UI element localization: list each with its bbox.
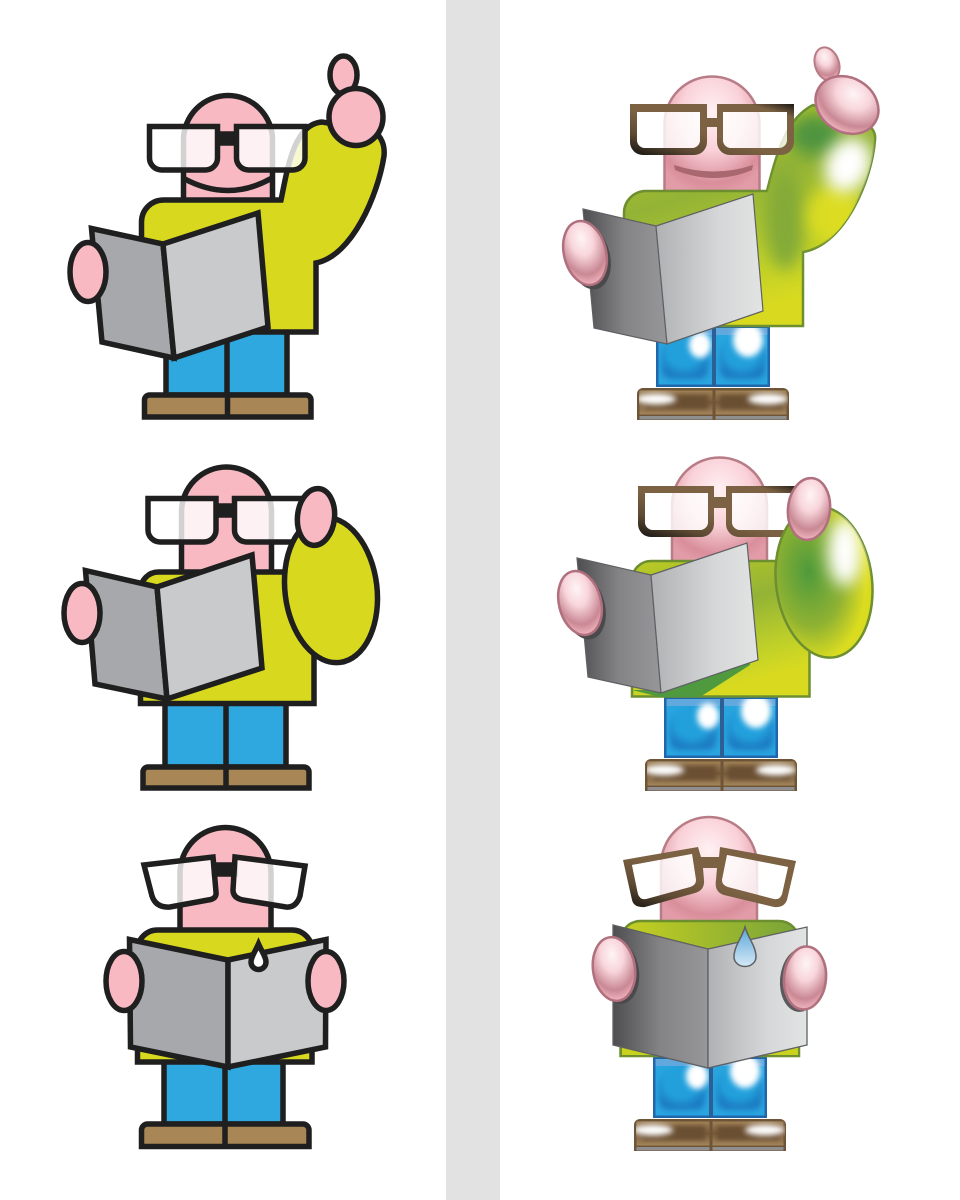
left hand shadow	[593, 937, 643, 1007]
glossy figure: arm raised as oval	[552, 458, 881, 791]
glossy legs and shoes	[644, 694, 797, 791]
thumb	[810, 44, 844, 84]
raised hand	[295, 487, 337, 547]
flat figure: front view with raindrop	[106, 828, 344, 1146]
shoes	[142, 1124, 309, 1146]
hand holding newspaper	[557, 216, 613, 290]
raised arm oval	[774, 508, 874, 659]
legs	[166, 330, 287, 395]
newspaper	[130, 940, 326, 1067]
glasses	[630, 104, 794, 155]
glasses	[148, 498, 304, 542]
glasses	[150, 126, 305, 170]
raindrop	[251, 944, 266, 970]
shoes	[143, 767, 309, 788]
legs	[164, 1060, 283, 1124]
glossy head	[661, 817, 757, 922]
flat figure: arm raised as oval	[64, 467, 386, 788]
glossy legs and shoes	[636, 323, 789, 420]
hand holding newspaper	[70, 242, 106, 302]
newspaper	[613, 925, 807, 1068]
shirt with raised arm	[142, 122, 384, 332]
head	[182, 467, 272, 574]
shirt	[140, 572, 314, 704]
hand holding newspaper	[64, 584, 100, 642]
glossy figure: arm raised with thumb up	[557, 44, 889, 420]
shoes	[144, 395, 311, 417]
glossy shirt with raised arm	[624, 105, 880, 326]
hand shadow	[556, 570, 612, 644]
head	[180, 828, 271, 932]
glossy shirt	[632, 561, 810, 696]
newspaper	[92, 213, 268, 358]
vertical grey divider band	[446, 0, 500, 1200]
glossy legs and shoes	[633, 1054, 786, 1151]
right hand	[308, 952, 344, 1010]
thumb	[330, 56, 357, 94]
hand holding newspaper	[552, 566, 608, 640]
newspaper	[86, 555, 262, 699]
head	[184, 96, 272, 202]
newspaper	[583, 194, 763, 344]
left hand	[589, 934, 639, 1004]
left hand	[106, 952, 142, 1010]
glasses	[144, 857, 305, 907]
shirt	[138, 930, 312, 1062]
glossy figure: front view with raindrop	[589, 817, 829, 1151]
newspaper shadow on shirt	[632, 645, 750, 697]
flat figure: arm raised with thumb up	[70, 56, 384, 417]
hand shadow	[561, 220, 617, 294]
right hand	[781, 945, 829, 1011]
legs	[165, 702, 286, 767]
glasses	[623, 847, 796, 907]
raised arm oval	[276, 512, 386, 668]
smile	[674, 165, 753, 178]
raindrop	[734, 927, 756, 966]
fist	[329, 88, 383, 146]
newspaper	[577, 543, 758, 693]
glossy head	[664, 76, 760, 191]
raised hand	[785, 476, 833, 542]
glossy shirt hem	[621, 1040, 799, 1056]
fist	[805, 65, 889, 145]
glossy head	[672, 458, 767, 562]
glasses	[638, 486, 800, 537]
right hand shadow	[777, 946, 825, 1014]
glossy shirt	[620, 921, 799, 1056]
smile	[183, 178, 272, 190]
